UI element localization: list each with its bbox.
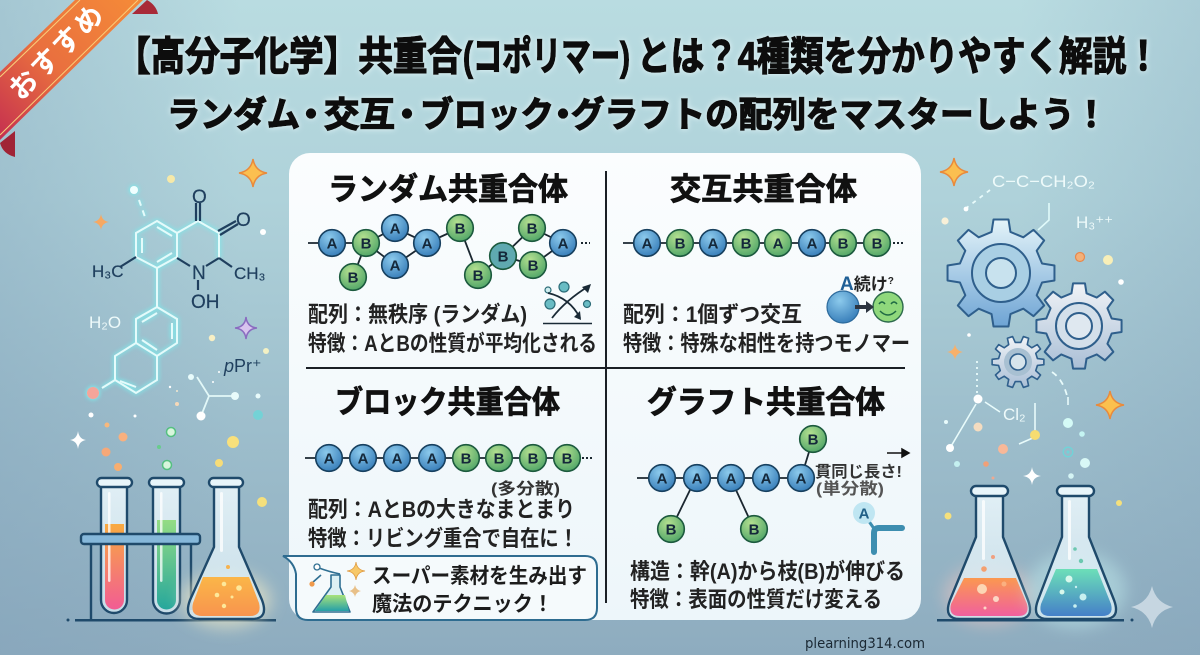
chain: random sequence: B — [455, 220, 466, 238]
left illustration: molecule — [87, 159, 269, 420]
chain: graft structure: B — [749, 522, 760, 538]
chain: random sequence: B — [528, 258, 539, 274]
left illustration: test tubes on a rack — [66, 478, 276, 622]
arrow: chain direction — [887, 449, 909, 457]
right illustration: formulas and connector dots: H₃⁺⁺ — [1076, 213, 1113, 232]
callout: magic technique — [283, 556, 597, 620]
subtitle: ・ — [389, 96, 425, 135]
chain: alternating sequence: B — [872, 236, 883, 252]
icon: crossing arrows — [543, 282, 592, 324]
left illustration: molecule: H₃C — [92, 262, 123, 281]
chain: random sequence: A — [558, 236, 569, 252]
note: monodisperse: (単分散) — [816, 479, 884, 498]
chain: block sequence: A — [427, 450, 438, 468]
text: random feature: 特徴：AとBの性質が平均化される — [308, 331, 597, 356]
left illustration: molecule: pPr⁺ — [223, 356, 262, 376]
text: alternating feature: 特徴：特殊な相性を持つモノマー — [623, 331, 910, 356]
right illustration: lower formula and particles: Cl₂ — [1003, 405, 1026, 424]
chain: random sequence: B — [527, 220, 538, 238]
icon: sparkling flask — [309, 562, 365, 612]
right illustration: teal flask — [937, 486, 1134, 628]
text: block feature: 特徴：リビング重合で自在に！ — [308, 526, 578, 551]
text: graft feature: 特徴：表面の性質だけ変える — [630, 587, 882, 612]
heading: block: ブロック共重合体 — [335, 385, 560, 420]
chain: alternating sequence: A — [642, 236, 653, 252]
heading: random: ランダム共重合体 — [328, 172, 568, 207]
icon: large blue gear — [948, 220, 1054, 326]
left illustration: molecule: CH₃ — [234, 264, 265, 283]
chain: alternating sequence: B — [741, 236, 752, 252]
left illustration: orange flask — [181, 478, 271, 628]
chain: block sequence: B — [562, 450, 573, 468]
icon: A followed by smiling B — [827, 274, 903, 323]
left illustration: molecule: O — [236, 210, 251, 231]
chain: random sequence: A — [327, 236, 338, 252]
icon: small gear — [992, 337, 1044, 387]
left illustration: molecule: O — [192, 187, 207, 208]
grid dividers — [306, 171, 905, 603]
icon: medium silver gear — [1036, 283, 1122, 369]
left illustration: molecule: OH — [191, 292, 220, 313]
chain: alternating sequence: A — [807, 236, 818, 252]
chain: graft structure: A — [726, 470, 737, 488]
panel: alternating copolymer — [623, 172, 910, 356]
panel: random copolymer — [308, 172, 597, 356]
chain: block sequence: A — [358, 450, 369, 468]
text: graft structure: 構造：幹(A)から枝(B)が伸びる — [630, 559, 905, 584]
chain: random sequence — [308, 215, 590, 290]
title: 【高分子化学】共重合 — [116, 35, 462, 79]
callout text second line: 魔法のテクニック！ — [372, 593, 553, 616]
left illustration: particles — [70, 402, 267, 507]
website credit: plearning314.com — [805, 636, 925, 652]
heading: graft: グラフト共重合体 — [647, 385, 885, 420]
title — [116, 35, 1160, 79]
recommendation ribbon: おすすめ — [3, 0, 110, 106]
subtitle: グラフトの配列をマスターしよう！ — [571, 96, 1108, 135]
recommendation ribbon — [0, 0, 158, 157]
chain: block sequence: B — [494, 450, 505, 468]
chain: random sequence: A — [390, 220, 401, 238]
icon: A followed by smiling B: ? — [888, 276, 894, 287]
text: alternating sequence: 配列：1個ずつ交互 — [623, 302, 802, 327]
chain: graft structure: B — [808, 432, 819, 448]
panel: block copolymer — [305, 385, 593, 551]
text: block sequence: 配列：AとBの大きなまとまり — [308, 497, 575, 522]
chain: graft structure: A — [657, 470, 668, 488]
panel: graft copolymer — [630, 385, 909, 612]
note: polydisperse: (多分散) — [491, 480, 560, 498]
icon: branch with A — [853, 502, 902, 552]
subtitle: 交互 — [324, 96, 395, 135]
decorative large pale star — [1131, 586, 1173, 628]
chain: block sequence — [305, 445, 593, 471]
chain: block sequence: A — [324, 450, 335, 468]
right illustration: pink flask — [944, 486, 1034, 625]
chain: graft structure: A — [692, 470, 703, 488]
chain: alternating sequence: B — [675, 236, 686, 252]
chain: alternating sequence: A — [773, 236, 784, 252]
note: same length: 貫同じ長さ! — [815, 463, 902, 481]
subtitle: ・ — [545, 96, 581, 135]
chain: block sequence: A — [392, 450, 403, 468]
right illustration: lower formula and particles — [944, 391, 1124, 520]
chain: random sequence: B — [473, 268, 484, 284]
subtitle — [167, 95, 1108, 135]
right illustration: formulas and connector dots: C−C−CH₂O₂ — [992, 172, 1095, 191]
chain: alternating sequence — [623, 230, 903, 256]
chain: alternating sequence: A — [708, 236, 719, 252]
chain: random sequence: A — [422, 236, 433, 252]
chain: block sequence: B — [528, 450, 539, 468]
subtitle: ブロック — [420, 95, 554, 135]
text: random sequence: 配列：無秩序 (ランダム) — [308, 302, 527, 327]
left illustration: molecule: H₂O — [89, 313, 121, 332]
chain: graft structure — [637, 426, 826, 542]
chain: alternating sequence: B — [838, 236, 849, 252]
subtitle: ランダム — [167, 95, 300, 135]
heading: alternating: 交互共重合体 — [670, 172, 857, 207]
panel: main white board — [289, 153, 921, 620]
title: (コポリマー) — [463, 35, 630, 79]
chain: random sequence: A — [390, 258, 401, 274]
chain: graft structure: A — [761, 470, 772, 488]
icon: branch with A: A — [859, 506, 870, 522]
callout text: スーパー素材を生み出す — [372, 565, 587, 588]
right illustration: formulas and connector dots — [940, 158, 1124, 404]
chain: graft structure: A — [796, 470, 807, 488]
chain: block sequence: B — [461, 450, 472, 468]
chain: random sequence: B — [348, 270, 359, 286]
left illustration: molecule: N — [192, 263, 206, 284]
icon: A followed by smiling B: A続け — [840, 274, 888, 295]
chain: graft structure: B — [666, 522, 677, 538]
chain: random sequence: B — [361, 236, 372, 252]
subtitle: ・ — [293, 96, 329, 135]
chain: random sequence: B — [498, 248, 509, 266]
